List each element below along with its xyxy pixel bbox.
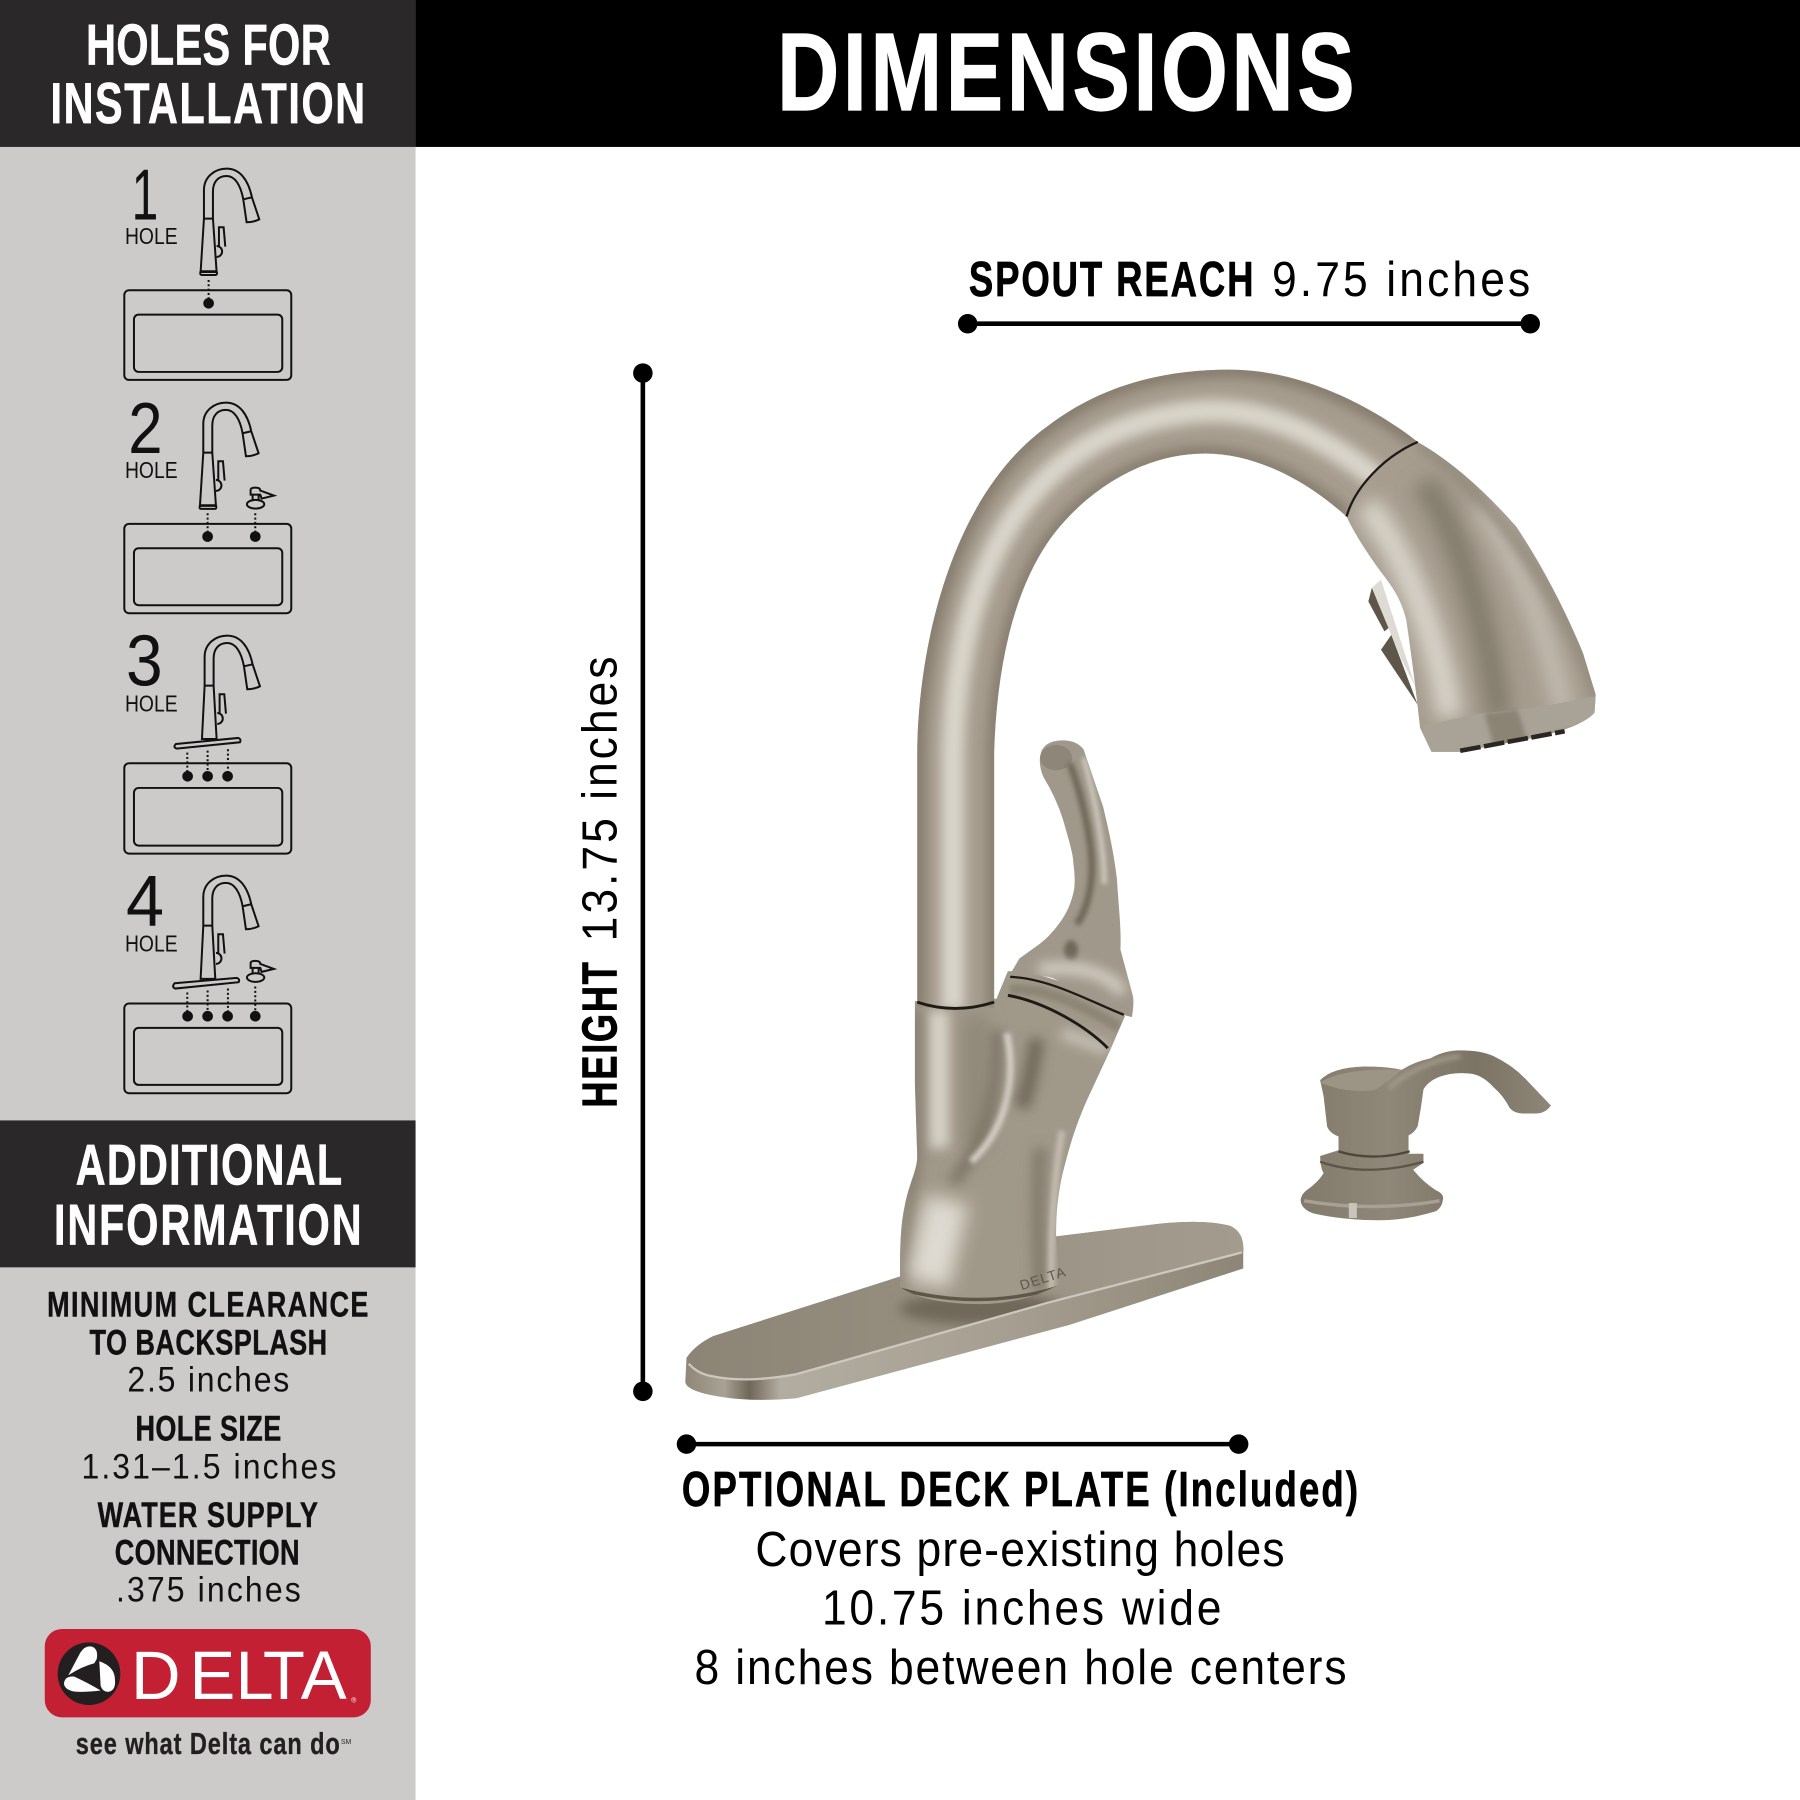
arrow: spout reach dimension line [958,314,1540,333]
label: height: HEIGHT [573,962,628,1108]
text block: optional deck plate: 8 inches between hole centers [695,1639,1347,1695]
header: additional information: ADDITIONAL [76,1133,342,1197]
text block: optional deck plate: 10.75 inches wide [822,1579,1221,1635]
logo: delta: ® [351,1696,356,1704]
diagram: 1 hole [124,155,291,380]
image: faucet handle [1008,740,1133,1017]
image: deck plate [685,1222,1243,1400]
arrow: height dimension line [633,363,653,1401]
text block: hole size [82,1408,336,1487]
arrow: deck plate dimension line [677,1434,1248,1454]
text block: water supply connection [98,1494,318,1610]
image: faucet spout gooseneck [917,370,1418,1010]
text block: optional deck plate: OPTIONAL DECK PLATE (Included) [682,1463,1358,1517]
header: additional information: INFORMATION [54,1193,362,1257]
logo: delta: DELTA [131,1637,347,1714]
diagram: 3 hole: 3 [126,622,163,702]
title banner: dimensions: DIMENSIONS [777,11,1355,134]
label: spout reach: 9.75 inches [1272,251,1530,307]
text block: minimum clearance: TO BACKSPLASH [90,1322,327,1362]
diagram: 2 hole [124,389,291,613]
diagram: 4 hole: 4 [126,862,164,942]
logo: delta [45,1629,371,1761]
diagram: 3 hole: HOLE [125,691,178,717]
diagram: 2 hole: HOLE [125,457,178,483]
header: holes for installation: INSTALLATION [51,71,365,135]
panel: sidebar background [0,0,416,1800]
text block: minimum clearance: 2.5 inches [127,1360,289,1400]
text block: water supply connection: CONNECTION [115,1532,300,1573]
label: height [571,657,628,1108]
image: soap dispenser [1301,1050,1551,1220]
header: additional information [0,1120,416,1267]
text block: water supply connection: WATER SUPPLY [98,1494,318,1535]
text block: hole size: 1.31–1.5 inches [82,1447,336,1487]
label: spout reach: SPOUT REACH [969,253,1254,308]
text block: hole size: HOLE SIZE [135,1408,281,1449]
image: pull-down spray head [1347,442,1598,755]
text block: water supply connection: .375 inches [116,1570,301,1610]
text block: optional deck plate [682,1463,1358,1695]
label: spout reach [969,251,1530,308]
logo: delta: SM [341,1739,352,1746]
diagram: 3 hole [124,622,291,854]
text block: minimum clearance [47,1284,368,1400]
header: holes for installation: HOLES FOR [86,13,331,77]
image: faucet body [900,971,1125,1304]
diagram: 4 hole [124,862,291,1093]
diagram: 1 hole: HOLE [125,223,178,249]
diagram: 4 hole: HOLE [125,931,178,957]
title banner: dimensions [416,0,1800,147]
diagram: 1 hole: 1 [132,155,158,235]
label: height: 13.75 inches [571,657,627,941]
text block: optional deck plate: Covers pre-existing holes [755,1521,1285,1576]
text block: minimum clearance: MINIMUM CLEARANCE [47,1284,368,1325]
diagram: 2 hole: 2 [128,389,163,469]
image: faucet body: DELTA [1018,1264,1068,1293]
header: holes for installation [0,0,416,147]
logo: delta: see what Delta can do [76,1726,340,1761]
